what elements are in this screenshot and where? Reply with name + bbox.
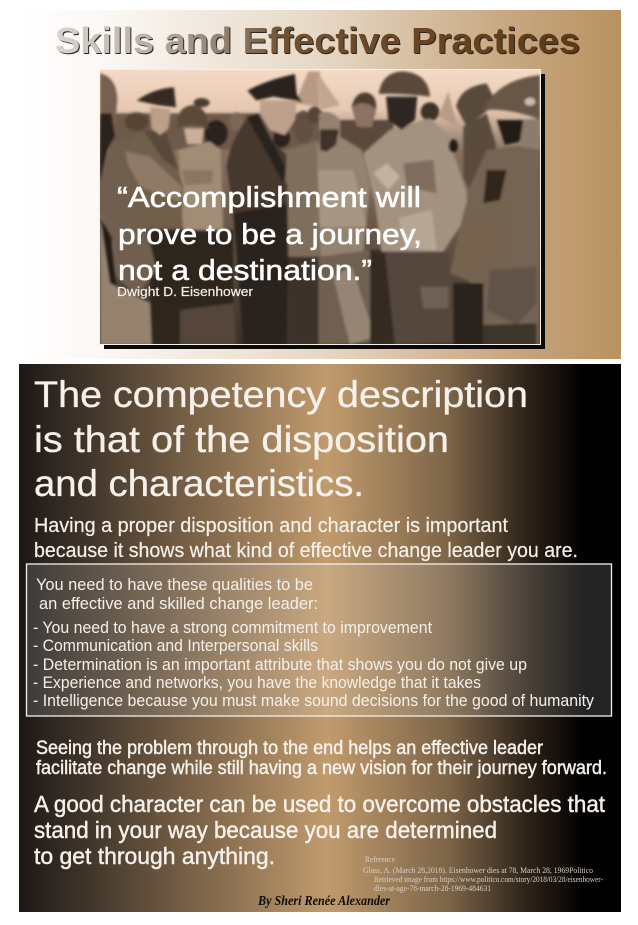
quote: prove to be a journey, bbox=[118, 219, 422, 251]
heading bbox=[34, 374, 528, 504]
reference: dies-at-age-78-march-28-1969-484631 bbox=[374, 883, 491, 893]
photo: Eisenhower with paratroopers bbox=[99, 69, 545, 349]
follow-through text: facilitate change while still having a new vision for their journey forward. bbox=[36, 758, 607, 779]
author credit: By Sheri Renée Alexander bbox=[257, 894, 390, 909]
qualities list: - Intelligence because you must make sound decisions for the good of humanity bbox=[33, 692, 595, 710]
far left soldier bbox=[100, 73, 117, 150]
qualities list: - Communication and Interpersonal skills bbox=[33, 637, 318, 655]
reference bbox=[363, 854, 603, 893]
heading: is that of the disposition bbox=[34, 419, 449, 460]
smiling soldier bbox=[178, 142, 223, 233]
heading: and characteristics. bbox=[34, 463, 364, 504]
Eisenhower coat bbox=[226, 118, 288, 214]
reference: Retrieved image from https://www.politico.com/story/2018/03/28/eisenhower- bbox=[374, 874, 603, 884]
heading: The competency description bbox=[34, 374, 528, 415]
follow-through text bbox=[36, 738, 607, 779]
main paratrooper bbox=[363, 118, 468, 252]
qualities box bbox=[26, 564, 612, 716]
reference: Glass, A. (March 28,2018). Eisenhower dies at 78, March 28, 1969Politico bbox=[363, 865, 593, 875]
right background crowd bbox=[287, 140, 320, 257]
qualities list bbox=[33, 619, 595, 710]
right paratroopers bbox=[456, 83, 497, 127]
good character text: to get through anything. bbox=[34, 843, 275, 869]
intro text: Having a proper disposition and character is important bbox=[34, 514, 508, 537]
quote: not a destination.” bbox=[118, 255, 372, 287]
centre soldier bbox=[317, 137, 370, 257]
panel: competency description bbox=[19, 364, 621, 912]
good character text bbox=[34, 791, 606, 869]
qualities list: - Determination is an important attribute that shows you do not give up bbox=[33, 656, 527, 674]
officer bbox=[126, 149, 184, 208]
qualities list: - Experience and networks, you have the knowledge that it takes bbox=[33, 674, 481, 692]
follow-through text: Seeing the problem through to the end helps an effective leader bbox=[36, 738, 544, 759]
dark lower centre bbox=[150, 230, 233, 345]
intro text bbox=[34, 514, 578, 562]
reference: Reference bbox=[365, 854, 395, 864]
right half figures bbox=[317, 71, 540, 345]
qualities list: - You need to have a strong commitment to improvement bbox=[33, 619, 432, 637]
box heading bbox=[36, 575, 318, 613]
quote bbox=[117, 182, 422, 299]
left half figures bbox=[100, 72, 322, 345]
good character text: A good character can be used to overcome obstacles that bbox=[34, 791, 606, 817]
good character text: stand in your way because you are determined bbox=[34, 817, 497, 843]
quote: Dwight D. Eisenhower bbox=[117, 284, 254, 299]
quote: “Accomplishment will bbox=[117, 182, 421, 214]
panel: top header bbox=[19, 10, 621, 359]
intro text: because it shows what kind of effective change leader you are. bbox=[34, 539, 578, 562]
box heading: You need to have these qualities to be bbox=[36, 575, 313, 594]
box heading: an effective and skilled change leader: bbox=[39, 594, 318, 613]
title: Skills and Effective Practices bbox=[55, 20, 580, 61]
